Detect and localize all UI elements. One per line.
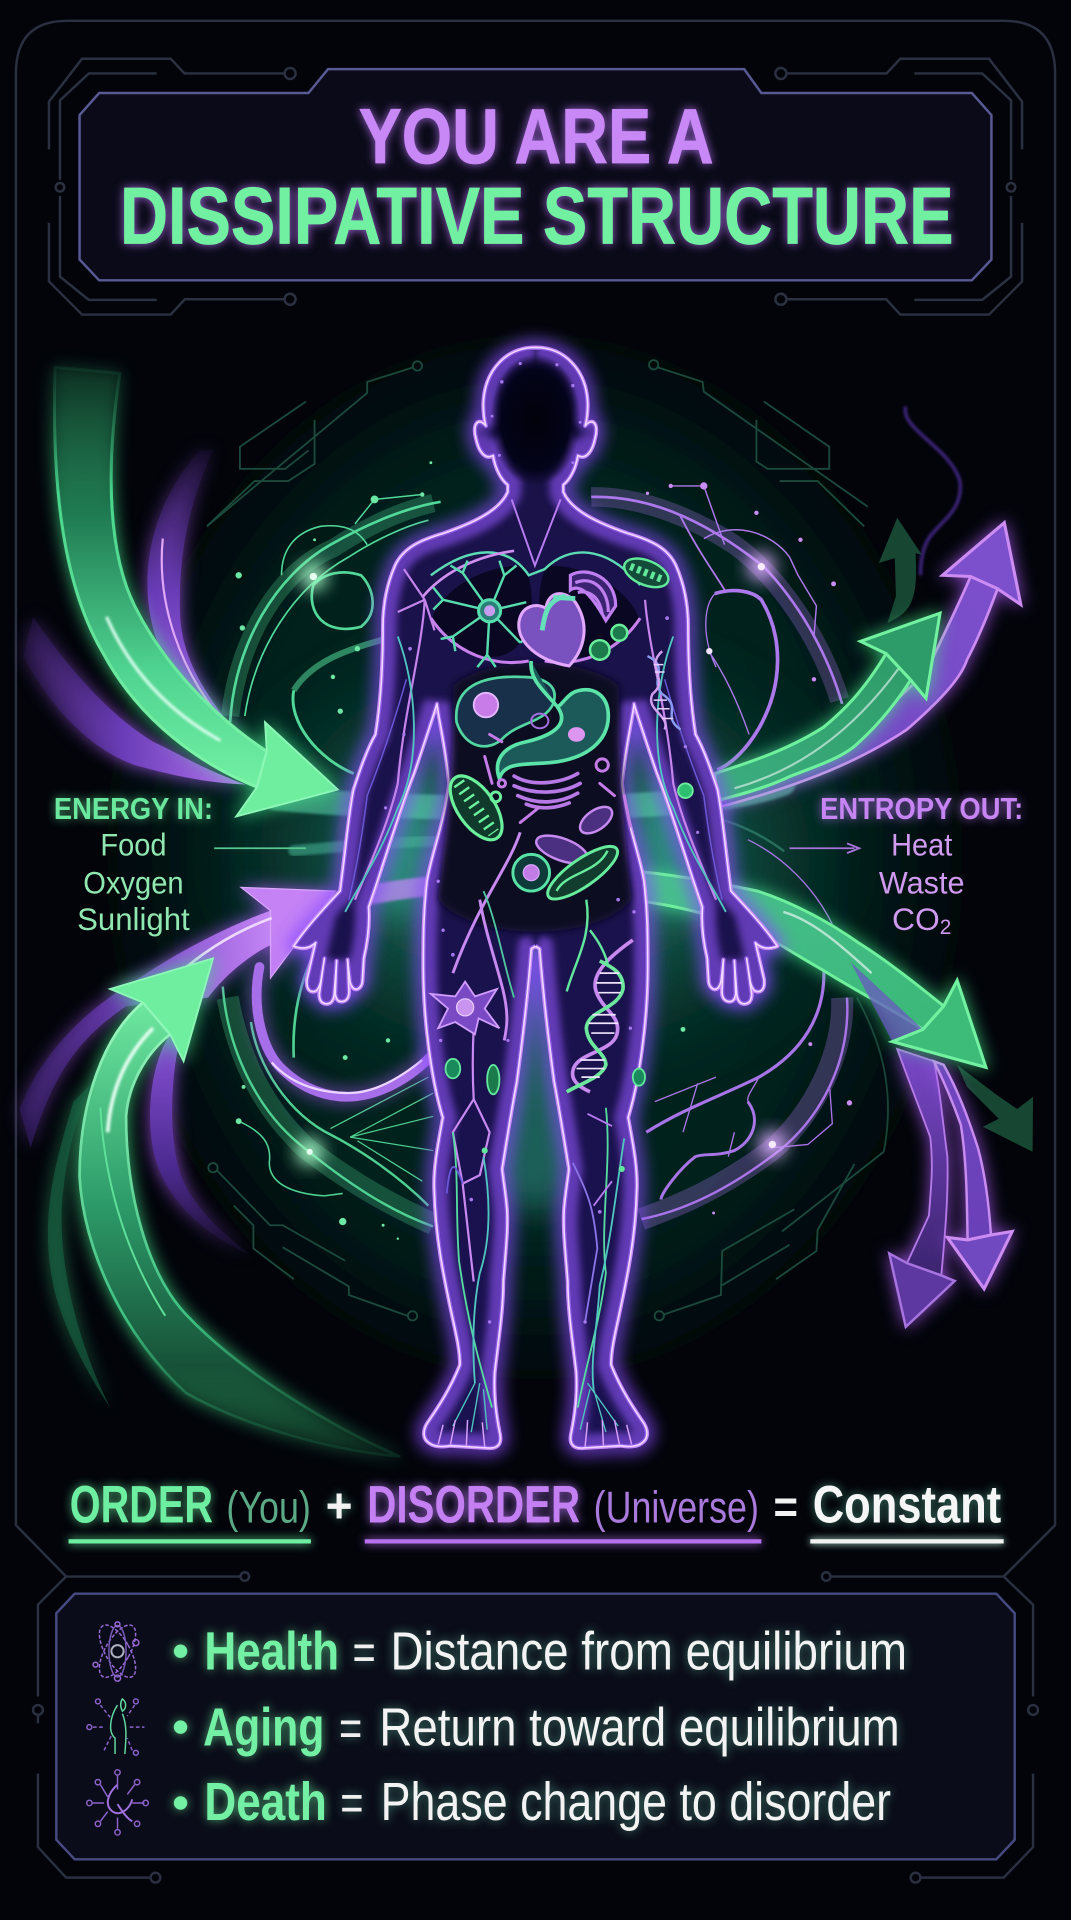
title circuit frame — [49, 59, 1022, 315]
bottom panel — [56, 1594, 1015, 1859]
purple arrow — [717, 523, 1021, 807]
item: death: Phase change to disorder — [381, 1772, 891, 1832]
green shaft — [48, 958, 400, 1457]
label: entropy out: Waste — [879, 865, 965, 901]
toes — [438, 1420, 632, 1447]
label: entropy out: ENTROPY OUT: — [820, 792, 1023, 826]
left green mitochondrion — [440, 767, 512, 848]
ring nodes — [235, 461, 852, 1240]
ring: lower right purple web — [641, 840, 847, 1219]
equation: DISORDER — [367, 1476, 580, 1535]
item: aging: Return toward equilibrium — [379, 1697, 900, 1757]
item: health — [174, 1622, 907, 1682]
bright outline — [294, 348, 777, 1448]
green arrow — [639, 872, 986, 1067]
purple long arrow — [20, 887, 335, 1148]
equation — [69, 1476, 1004, 1543]
label: entropy out: Heat — [891, 827, 952, 863]
liver cell — [456, 677, 555, 746]
inner purple rim — [294, 348, 536, 1448]
purple arrow far — [889, 1049, 991, 1327]
human figure — [294, 348, 777, 1448]
purple lower trail — [23, 617, 246, 785]
organelle: upper golgi — [570, 572, 616, 621]
leg veins — [446, 1059, 645, 1432]
body silhouette — [294, 348, 777, 1448]
label: entropy out: CO — [892, 901, 940, 937]
green shaft — [54, 367, 338, 816]
label: entropy out — [820, 792, 1023, 939]
pectoral lines and neck vessels — [345, 499, 726, 912]
streams behind the body — [275, 783, 783, 900]
green vesicles — [590, 625, 627, 660]
DNA in thigh — [567, 940, 633, 1092]
arrow: entropy out, upper right — [715, 406, 1021, 807]
purple arrow near — [934, 1061, 1012, 1289]
label: energy in — [54, 792, 213, 937]
heart — [519, 594, 584, 666]
icon: dispersing network — [87, 1770, 148, 1835]
arrow: entropy out, lower right — [639, 872, 1033, 1327]
dark green arrow — [879, 518, 922, 623]
item: health: = — [353, 1623, 376, 1681]
arrow: entropy out pointer — [789, 843, 859, 853]
item: aging — [174, 1697, 900, 1757]
label: energy in: Oxygen — [83, 865, 184, 901]
torso dark zones — [431, 565, 640, 932]
stomach and esophagus — [497, 661, 608, 778]
icon: aging figure — [87, 1699, 144, 1755]
item: death — [174, 1772, 891, 1832]
arrow: energy in pointer — [214, 847, 306, 849]
round cell — [513, 854, 550, 891]
lower golgi stack — [514, 774, 580, 808]
organelle: upper green mitochondrion — [620, 553, 672, 593]
item: death: = — [340, 1773, 364, 1831]
equation: (Universe) — [594, 1484, 759, 1533]
ring: upper right purple web — [591, 486, 842, 770]
equation: = — [774, 1481, 798, 1533]
green arrow — [715, 613, 940, 801]
title panel — [80, 69, 991, 280]
item: health: Health — [204, 1622, 339, 1682]
DNA in arm — [647, 651, 681, 730]
purple upper trail — [147, 450, 240, 737]
label: energy in: ENERGY IN: — [54, 792, 213, 826]
ring: upper left green web — [230, 495, 441, 774]
body glow — [294, 348, 777, 1448]
arrow: energy in, upper left green — [23, 367, 338, 816]
label: entropy out: 2 — [940, 916, 951, 939]
purple inner trail — [150, 1034, 250, 1255]
star neuron — [431, 982, 499, 1034]
purple mitochondria — [533, 802, 617, 869]
nerve tree in left thigh — [453, 832, 520, 1282]
equation: ORDER — [70, 1476, 213, 1535]
title line 1: YOU ARE A — [359, 92, 714, 180]
speckles — [384, 362, 699, 1324]
ring: lower left green web — [223, 881, 433, 1226]
small organelles — [485, 734, 630, 826]
equation: (You) — [226, 1484, 311, 1533]
energy swirl rings — [223, 461, 852, 1240]
equation: + — [326, 1480, 353, 1534]
item: aging: Aging — [203, 1697, 324, 1757]
item: death: Death — [204, 1772, 327, 1832]
equation: Constant — [813, 1476, 1001, 1535]
dark face — [490, 354, 581, 486]
circuit traces around the figure — [207, 360, 888, 1320]
icon: atom — [92, 1620, 143, 1683]
label: energy in: Food — [100, 827, 166, 863]
equation underlines — [69, 1539, 1004, 1543]
item: health: Distance from equilibrium — [390, 1622, 907, 1682]
neuron in chest — [433, 561, 529, 667]
arrow: purple recycling loop — [257, 967, 430, 1097]
long green organelle — [541, 838, 624, 908]
item: aging: = — [339, 1698, 362, 1756]
arrow: energy in, lower left green — [20, 887, 400, 1457]
label: energy in: Sunlight — [77, 901, 190, 937]
green cell on forearm — [678, 783, 693, 798]
green nerve beside DNA — [567, 900, 608, 991]
smoke wisp — [905, 406, 960, 575]
dark green arrow — [957, 1065, 1033, 1152]
